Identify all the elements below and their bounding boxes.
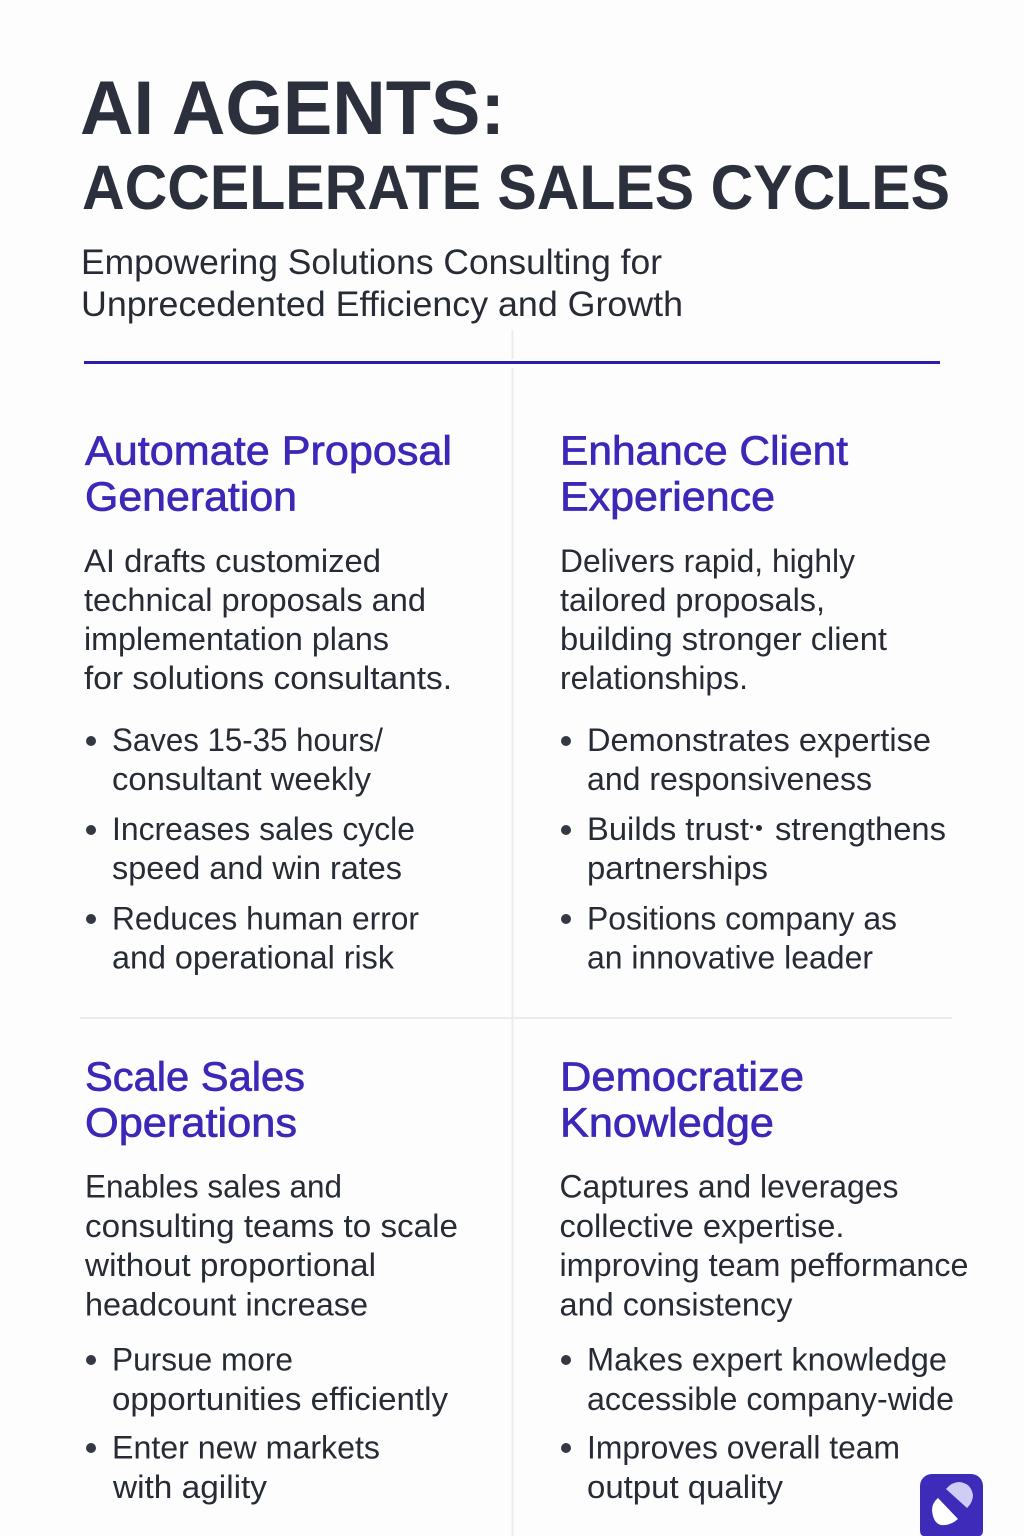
text block: description: building stronger client bbox=[560, 621, 887, 657]
bullet list: with agility bbox=[112, 1469, 268, 1505]
bullet list: Reduces human error bbox=[112, 900, 419, 936]
bullet list: consultant weekly bbox=[112, 761, 372, 797]
heading: scale sales operations: Scale Sales bbox=[85, 1054, 305, 1100]
panel: democratize knowledge bbox=[560, 1054, 968, 1505]
subtitle: Unprecedented Efficiency and Growth bbox=[81, 285, 683, 324]
subtitle bbox=[81, 243, 683, 324]
heading: automate proposal generation: Automate Proposal bbox=[85, 428, 452, 474]
bullet list: Pursue more bbox=[112, 1342, 293, 1378]
bullet list bbox=[561, 722, 946, 976]
bullet list: and responsiveness bbox=[587, 761, 872, 797]
text block: description: consulting teams to scale bbox=[85, 1208, 458, 1244]
text block: description: headcount increase bbox=[85, 1286, 368, 1322]
text block: description: Delivers rapid, highly bbox=[560, 543, 856, 579]
text block: description: for solutions consultants. bbox=[84, 660, 452, 696]
heading: democratize knowledge: Democratize bbox=[560, 1054, 804, 1100]
bullet list: Saves 15-35 hours/ bbox=[112, 722, 384, 758]
bullet list: Improves overall team bbox=[587, 1430, 900, 1466]
bullet list bbox=[86, 722, 419, 976]
title bbox=[80, 66, 950, 223]
bullet list: partnerships bbox=[587, 850, 768, 886]
text block: description: technical proposals and bbox=[84, 582, 426, 618]
text block: description: improving team pefformance bbox=[560, 1247, 968, 1283]
text block: description: implementation plans bbox=[84, 621, 389, 657]
heading: democratize knowledge bbox=[560, 1054, 804, 1146]
heading: scale sales operations: Operations bbox=[85, 1100, 297, 1146]
bullet list: Positions company as bbox=[587, 900, 897, 936]
bullet list: Builds trust bbox=[587, 811, 749, 847]
text block: description bbox=[84, 543, 452, 696]
title: ACCELERATE SALES CYCLES bbox=[82, 153, 950, 223]
bullet list: Demonstrates expertise bbox=[587, 722, 931, 758]
text block: description bbox=[560, 1168, 968, 1322]
heading: enhance client experience: Enhance Client bbox=[560, 428, 849, 474]
text block: description: tailored proposals, bbox=[560, 582, 825, 618]
text block: description: without proportional bbox=[84, 1247, 376, 1283]
bullet list: strengthens bbox=[775, 811, 946, 847]
heading: enhance client experience: Experience bbox=[560, 474, 775, 520]
heading: democratize knowledge: Knowledge bbox=[560, 1100, 774, 1146]
heading: automate proposal generation bbox=[85, 428, 452, 520]
bullet list: Enter new markets bbox=[112, 1430, 380, 1466]
bullet list: opportunities efficiently bbox=[112, 1381, 449, 1417]
text block: description: and consistency bbox=[560, 1286, 793, 1322]
bullet list: output quality bbox=[587, 1469, 784, 1505]
bullet list bbox=[561, 1342, 954, 1505]
bullet list: Makes expert knowledge bbox=[587, 1342, 947, 1378]
bullet list: accessible company-wide bbox=[587, 1381, 954, 1417]
text block: description bbox=[560, 543, 887, 696]
bullet list: speed and win rates bbox=[112, 850, 402, 886]
panel: scale sales operations bbox=[84, 1054, 458, 1505]
text block: description: collective expertise. bbox=[560, 1208, 844, 1244]
bullet list bbox=[86, 1342, 449, 1505]
heading: automate proposal generation: Generation bbox=[85, 474, 297, 520]
bullet list: and operational risk bbox=[112, 940, 395, 976]
heading: scale sales operations bbox=[85, 1054, 305, 1146]
subtitle: Empowering Solutions Consulting for bbox=[81, 243, 662, 282]
text block: description: relationships. bbox=[560, 660, 748, 696]
title: AI AGENTS: bbox=[80, 66, 505, 151]
heading: enhance client experience bbox=[560, 428, 849, 520]
panel: enhance client experience bbox=[560, 428, 946, 976]
text block: description: AI drafts customized bbox=[84, 543, 381, 579]
bullet list: Increases sales cycle bbox=[112, 811, 415, 847]
text block: description: Captures and leverages bbox=[560, 1168, 898, 1204]
text block: description bbox=[84, 1168, 458, 1322]
text block: description: Enables sales and bbox=[85, 1168, 342, 1204]
panel: automate proposal generation bbox=[84, 428, 452, 976]
bullet list: an innovative leader bbox=[587, 940, 873, 976]
icon: logo badge bbox=[920, 1474, 983, 1536]
